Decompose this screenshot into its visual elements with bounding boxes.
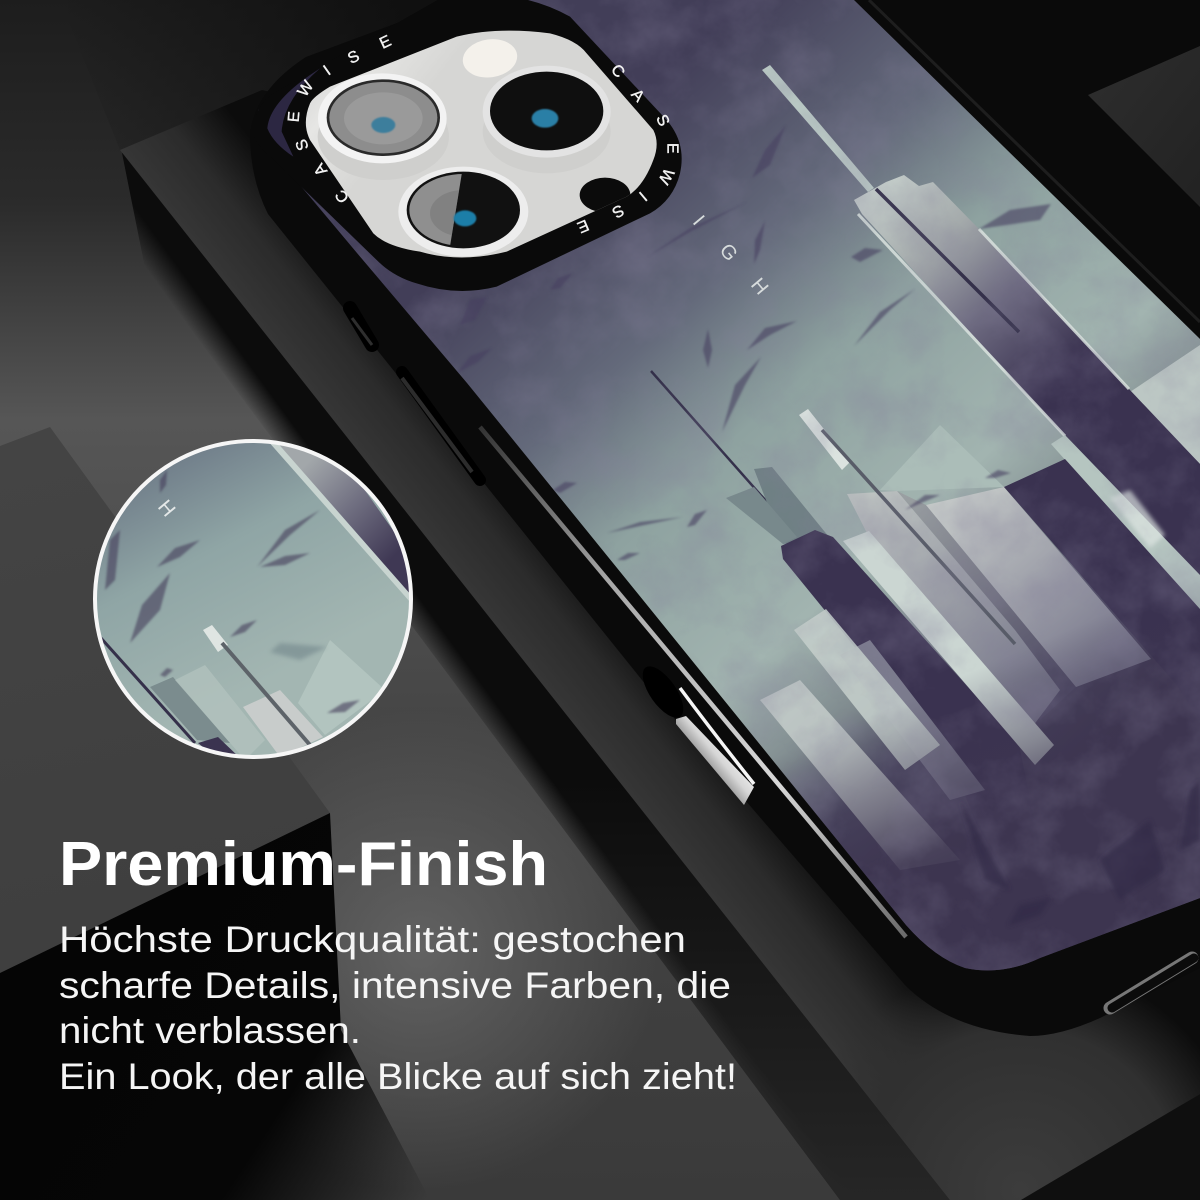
magnifier loupe: [90, 440, 420, 765]
loupe white stripe: [203, 625, 310, 745]
thin dark line: [650, 370, 767, 502]
loupe ring: [95, 441, 411, 757]
loupe creases: [105, 470, 360, 713]
CASEWISE ring lettering right: S: [652, 112, 672, 129]
grey step upper: [754, 467, 829, 544]
CASEWISE ring lettering right: S: [609, 201, 627, 221]
middle dark grey tower: [898, 492, 1060, 676]
artwork letters HIGH: G: [715, 240, 742, 266]
upper right purple block: [1004, 459, 1200, 651]
CASEWISE ring lettering left: C: [332, 186, 353, 206]
grey stripe under tower: [857, 640, 985, 800]
body text: Ein Look, der alle Blicke auf sich zieht!: [59, 1056, 737, 1097]
lower purple tower: [781, 530, 1012, 769]
top right block: [1088, 46, 1200, 207]
camera island: [253, 0, 682, 291]
loupe grey step: [150, 677, 230, 743]
top thin light stripe: [762, 65, 874, 192]
right light region: [1130, 345, 1200, 464]
phone case body: [250, 0, 1200, 1036]
light teal block: [880, 425, 1004, 491]
case edge highlight: [480, 427, 906, 937]
side button middle: [402, 372, 480, 480]
CASEWISE ring lettering left: S: [345, 48, 362, 68]
heading: Premium-Finish: [59, 830, 548, 899]
CASEWISE ring lettering right: C: [607, 62, 628, 81]
loupe letter H: H: [153, 496, 179, 521]
CASEWISE ring lettering left: E: [377, 33, 394, 53]
charging port: [1110, 958, 1194, 1008]
CASEWISE ring lettering left: W: [295, 77, 318, 100]
lens 1: [318, 73, 449, 180]
right case rim: [869, 0, 1200, 322]
artwork letters HIGH: [693, 215, 769, 295]
upper skyline tower: [854, 175, 1200, 594]
loupe light wash: [175, 665, 265, 760]
loupe light stripe: [267, 440, 412, 602]
CASEWISE ring lettering left: I: [321, 63, 334, 79]
CASEWISE ring lettering left: [286, 33, 394, 206]
artwork letters HIGH: H: [746, 274, 772, 299]
CASEWISE ring lettering right: I: [635, 188, 650, 204]
glass window: [306, 31, 657, 257]
dark purple blotches: [960, 780, 1200, 926]
paper crumple texture: [356, 0, 1200, 970]
side button upper: [350, 308, 372, 345]
crease marks: [457, 125, 1051, 560]
loupe lower right light block: [298, 640, 385, 735]
body text: Höchste Druckqualität: gestochen: [59, 919, 686, 960]
tower dark centre line: [876, 189, 1019, 332]
loupe purple corner: [198, 737, 240, 765]
microphone hole: [580, 178, 630, 212]
flash: [462, 39, 518, 78]
bottom purple fade: [784, 586, 1200, 970]
lens 3: [398, 167, 528, 257]
right speckled tower: [926, 487, 1151, 687]
grey step lower: [726, 487, 797, 544]
body text: [59, 919, 737, 1097]
artwork letters HIGH: I: [688, 211, 708, 230]
silver side button: [635, 660, 754, 805]
bright band highlight: [1110, 490, 1165, 548]
loupe speckled block: [243, 690, 323, 757]
lower left pale stripe: [760, 680, 960, 870]
body text: scharfe Details, intensive Farben, die: [59, 965, 731, 1006]
long light band: [1051, 435, 1200, 612]
CASEWISE ring lettering left: E: [286, 111, 303, 123]
lower left white stripe: [794, 609, 940, 770]
loupe purple band: [280, 445, 409, 592]
CASEWISE ring lettering right: E: [575, 216, 591, 235]
middle stripe 2 tip: [799, 409, 850, 470]
lens 2: [482, 66, 610, 158]
CASEWISE ring lettering right: W: [654, 165, 677, 188]
CASEWISE ring lettering left: A: [311, 160, 331, 179]
CASEWISE ring lettering right: [575, 62, 681, 235]
loupe dark line: [100, 637, 195, 743]
stripe 2 dark line: [822, 430, 1015, 644]
CASEWISE ring lettering right: A: [628, 86, 648, 106]
loupe soft shadow: [270, 643, 327, 660]
phone back artwork: [258, 0, 1200, 970]
tower white edges: [858, 214, 1129, 436]
CASEWISE ring lettering left: S: [293, 137, 313, 153]
body text: nicht verblassen.: [59, 1010, 361, 1051]
island frame: [253, 0, 682, 291]
mid speckled tower: [847, 491, 1060, 730]
light stripe beside tower: [843, 531, 1054, 765]
purple gap in rim: [267, 68, 320, 157]
CASEWISE ring lettering right: E: [664, 143, 681, 154]
